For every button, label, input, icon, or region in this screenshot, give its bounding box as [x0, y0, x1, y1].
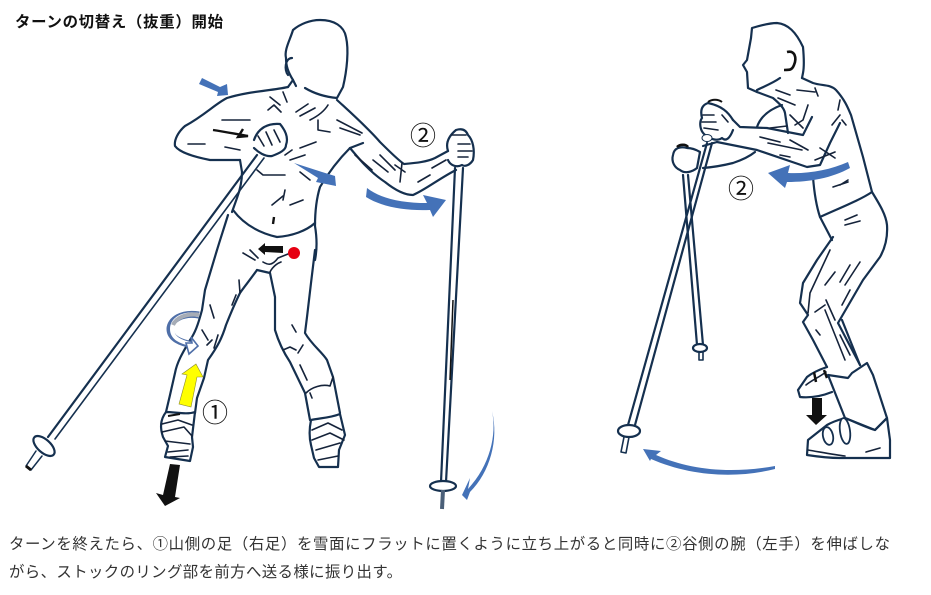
marker 2 right figure: ② [728, 174, 754, 204]
far hand [672, 147, 700, 172]
torso muscle details [188, 92, 362, 205]
neck [288, 80, 296, 87]
torso [315, 143, 363, 260]
torso and arm muscle details [760, 88, 860, 225]
right hand fist [254, 124, 287, 156]
hip crease [263, 254, 288, 264]
head [286, 20, 347, 98]
caption: ターンを終えたら、①山側の足（右足）を雪面にフラットに置くように立ち上がると同時に②谷側の腕（左手）を伸ばしな [9, 535, 890, 553]
rear boot [798, 367, 832, 397]
right-hand arm and shoulder [175, 87, 288, 160]
arm muscle details [355, 155, 446, 182]
near pole [618, 143, 712, 453]
arrow: blue chest rotation [294, 163, 336, 186]
back arm shoulder arc [757, 105, 782, 127]
ear [784, 52, 795, 70]
arrow: blue curved arm swing [366, 188, 446, 217]
near arm [733, 117, 812, 135]
arrow: knee rotation [170, 314, 199, 354]
ear [286, 58, 292, 75]
left leg [166, 215, 228, 412]
red dot: hip [288, 247, 300, 259]
head [743, 23, 804, 92]
marker 1 left figure: ① [202, 398, 228, 428]
back and rear outline [802, 78, 887, 365]
arrow: blue pole basket swing [462, 411, 494, 500]
chest and waist [813, 177, 832, 240]
near boot [807, 363, 890, 458]
right ski boot [310, 414, 345, 467]
arrow: black foot press [156, 464, 180, 506]
left pole [26, 155, 264, 470]
left ski boot [161, 412, 195, 461]
far pole [683, 175, 707, 360]
near hand [700, 103, 733, 140]
left hand fist [447, 129, 474, 166]
jaw and neck [757, 78, 788, 133]
right pole [430, 168, 463, 509]
arrow: blue pole swing side view [643, 449, 775, 475]
left skier figure (front view) [26, 20, 474, 509]
arrow: small black hip [258, 243, 283, 255]
arrow: blue shoulder push [199, 78, 228, 96]
caption: がら、ストックのリング部を前方へ送る様に振り出す。 [9, 563, 402, 581]
left-hand arm [337, 100, 448, 164]
arrow: black rear foot press [806, 398, 827, 425]
arrow: blue torso rotation side view [768, 162, 850, 188]
title: ターンの切替え（抜重）開始 [15, 13, 224, 31]
waist band [233, 210, 315, 237]
thighs [800, 237, 833, 367]
caption [9, 535, 890, 581]
far arm [703, 152, 755, 168]
marker 2 left figure: ② [410, 121, 436, 151]
right leg [305, 250, 340, 413]
right skier figure (side view) [618, 23, 890, 458]
arrow: yellow knee lift [179, 364, 203, 407]
